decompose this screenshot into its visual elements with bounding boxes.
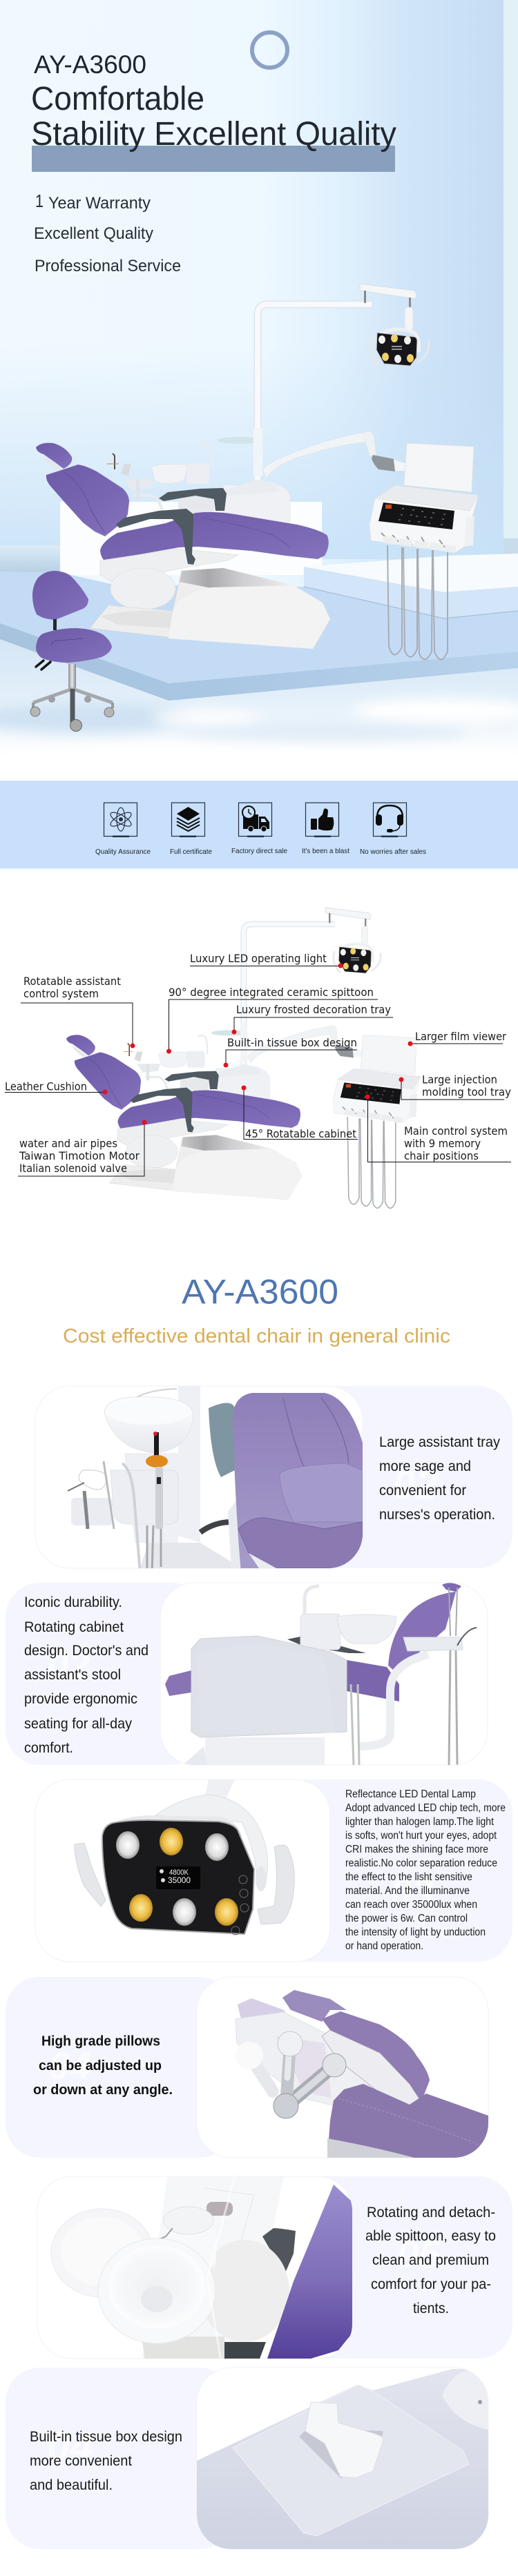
text: rotating spittoon — [365, 2205, 496, 2316]
badge captions: No worries after sales — [360, 848, 426, 856]
text: rotating spittoon: able spittoon, easy to — [365, 2228, 496, 2244]
ghost number: 04 — [47, 2423, 93, 2470]
headline: comfortable: Comfortable — [31, 81, 204, 117]
text: high grade pillows: High grade pillows — [41, 2033, 160, 2049]
diagram: dental chair unit — [66, 908, 421, 1208]
hero panel — [0, 0, 518, 782]
service badge band — [0, 781, 518, 870]
callout labels: Luxury frosted decoration tray — [236, 1003, 391, 1016]
text: reflectance LED lamp: or hand operation. — [345, 1940, 423, 1952]
text: tissue box: and beautiful. — [30, 2477, 113, 2493]
headline: model AY-A3600: AY-A3600 — [34, 50, 146, 79]
text: reflectance LED lamp: is softs, won't hurt your eyes, adopt — [345, 1830, 497, 1842]
badge captions: It's been a blast — [302, 848, 349, 855]
icon: headset support — [373, 803, 406, 837]
icon: factory direct sale truck — [239, 803, 272, 837]
callout labels: Italian solenoid valve — [19, 1162, 127, 1175]
headline: stability excellent quality: Stability Excellent Quality — [31, 116, 396, 153]
badge captions: Quality Assurance — [95, 848, 151, 856]
text: iconic durability: provide ergonomic — [24, 1691, 137, 1707]
text: reflectance LED lamp: can reach over 35000lux when — [345, 1899, 477, 1911]
text: assistant tray: Large assistant tray — [379, 1434, 500, 1450]
callout labels: molding tool tray — [422, 1085, 511, 1099]
text: reflectance LED lamp — [345, 1788, 506, 1952]
text: iconic durability — [24, 1594, 148, 1756]
photo: built-in tissue box — [197, 2369, 488, 2549]
icon: full certificate layers — [171, 803, 204, 837]
text: reflectance LED lamp: the effect to the lisht sensitive — [345, 1871, 472, 1883]
panel: adjustable pillows — [6, 1977, 488, 2158]
panel: rotating cabinet — [6, 1583, 488, 1765]
section title: AY-A3600 — [182, 1273, 338, 1311]
decorative ring — [252, 32, 287, 68]
ghost number: 02 — [47, 1643, 90, 1687]
photo: articulated headrest — [236, 1990, 488, 2158]
panel: detachable spittoon — [37, 2176, 512, 2361]
section subtitle: Cost effective dental chair in general clinic — [63, 1325, 450, 1347]
callout labels: control system — [23, 987, 99, 1000]
text: assistant tray: nurses's operation. — [379, 1507, 495, 1523]
text: reflectance LED lamp: the intensity of light by unduction — [345, 1926, 486, 1938]
text: assistant tray: more sage and — [379, 1458, 471, 1474]
text: high grade pillows: can be adjusted up — [39, 2058, 162, 2074]
text: tissue box: Built-in tissue box design — [30, 2429, 182, 2445]
text: reflectance LED lamp: Adopt advanced LED chip tech, more — [345, 1802, 506, 1814]
callout labels: Built-in tissue box design — [227, 1036, 357, 1049]
callout labels: Large injection — [422, 1073, 497, 1086]
text: reflectance LED lamp: lighter than halogen lamp.The light — [345, 1816, 495, 1828]
ghost number: 02 — [392, 1462, 439, 1508]
text: reflectance LED lamp: material. And the illuminanve — [345, 1885, 470, 1897]
text: rotating spittoon: clean and premium — [372, 2252, 489, 2268]
ghost number: 04 — [48, 2044, 91, 2087]
callout labels: chair positions — [404, 1149, 479, 1162]
badge captions: Factory direct sale — [231, 848, 287, 855]
text: iconic durability: Rotating cabinet — [24, 1619, 124, 1635]
text: iconic durability: Iconic durability. — [24, 1594, 122, 1610]
text: rotating spittoon: comfort for your pa- — [371, 2276, 491, 2292]
icon: thumbs up — [305, 803, 338, 837]
callout lines — [5, 966, 511, 1176]
text: tissue box — [30, 2429, 182, 2493]
callout labels: water and air pipes — [19, 1137, 117, 1150]
text: iconic durability: comfort. — [24, 1740, 73, 1756]
photo: spittoon bowls — [51, 2176, 352, 2361]
underline bar — [32, 146, 395, 172]
panel: tissue box — [6, 2368, 488, 2549]
photo: LED operating lamp — [75, 1779, 294, 1935]
text: rotating spittoon: tients. — [413, 2301, 449, 2316]
text: reflectance LED lamp: realistic.No color separation reduce — [345, 1857, 497, 1869]
text: iconic durability: design. Doctor's and — [24, 1643, 148, 1659]
callout labels: Taiwan Timotion Motor — [19, 1149, 140, 1162]
callout labels: 90° degree integrated ceramic spittoon — [169, 986, 374, 999]
callout labels: Larger film viewer — [415, 1030, 506, 1043]
callout markers — [102, 964, 413, 1125]
callout labels: 45° Rotatable cabinet — [245, 1127, 356, 1140]
badge captions: Full certificate — [170, 848, 212, 856]
photo: assistant tray and backrest — [68, 1386, 363, 1581]
list: warranty, quality, service: 1 — [35, 191, 44, 211]
text: assistant tray: convenient for — [379, 1483, 466, 1499]
text: high grade pillows: or down at any angle. — [33, 2082, 173, 2098]
photo: LED operating lamp: 35000 — [168, 1875, 191, 1885]
callout labels: Main control system — [404, 1124, 508, 1138]
callout labels: Luxury LED operating light — [190, 952, 327, 965]
text: tissue box: more convenient — [30, 2453, 132, 2469]
stool — [30, 571, 114, 732]
list: warranty, quality, service: Year Warranty — [48, 194, 151, 213]
callout labels: with 9 memory — [404, 1137, 481, 1150]
photo: LED operating lamp: 4800K — [169, 1868, 189, 1877]
badge captions — [95, 848, 426, 856]
callout labels — [5, 952, 511, 1175]
list: warranty, quality, service: Professional Service — [35, 257, 181, 275]
ghost number: 03 — [390, 1870, 433, 1913]
dental chair, lamp and control unit — [36, 284, 479, 660]
text: reflectance LED lamp: Reflectance LED Dental Lamp — [345, 1788, 476, 1800]
text: reflectance LED lamp: CRI makes the shining face more — [345, 1844, 488, 1855]
text: iconic durability: assistant's stool — [24, 1667, 121, 1683]
text: rotating spittoon: Rotating and detach- — [367, 2205, 495, 2221]
panel: assistant tray — [35, 1386, 512, 1581]
callout labels: Rotatable assistant — [23, 975, 121, 988]
text: reflectance LED lamp: the power is 6w. Can control — [345, 1913, 468, 1924]
panel: LED lamp — [35, 1779, 512, 1962]
ghost number: 05 — [397, 2232, 441, 2276]
text: iconic durability: seating for all-day — [24, 1716, 132, 1732]
list: warranty, quality, service: Excellent Quality — [34, 224, 153, 243]
icon: quality assurance atom — [104, 803, 137, 837]
list: warranty, quality, service — [34, 191, 181, 275]
text: high grade pillows — [33, 2033, 173, 2098]
text: assistant tray — [379, 1434, 500, 1523]
photo: cabinet and spittoon — [165, 1583, 477, 1765]
labelled product diagram — [5, 908, 511, 1208]
callout labels: Leather Cushion — [5, 1080, 87, 1093]
